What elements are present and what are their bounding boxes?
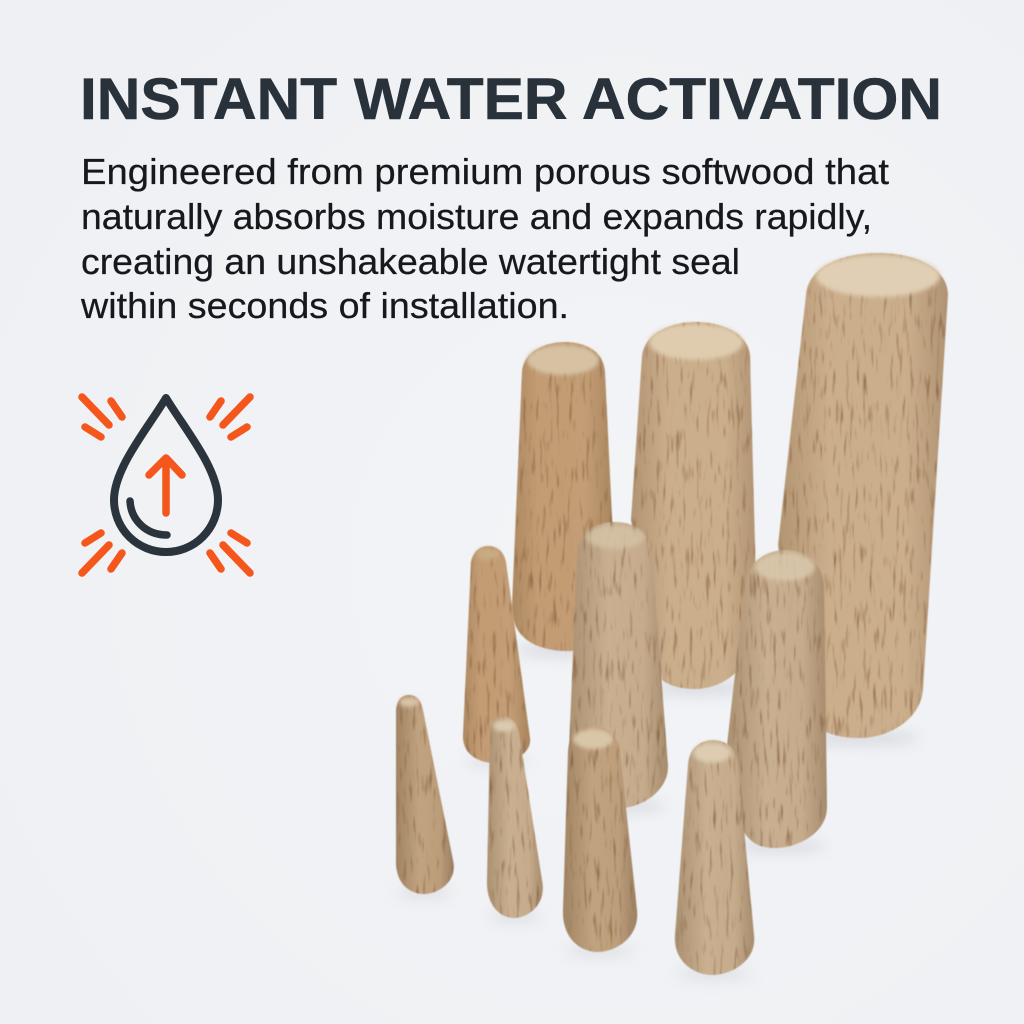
body text: creating an unshakeable watertight seal [81, 241, 740, 282]
product photo: wooden plugs [396, 253, 948, 979]
inner highlight curve [130, 501, 167, 535]
title: INSTANT WATER ACTIVATION [80, 67, 942, 132]
plug: back middle [631, 322, 757, 689]
plug: thin back left [463, 546, 530, 763]
plug: small far left [396, 695, 454, 894]
drop outline [114, 398, 218, 552]
body text: within seconds of installation. [80, 285, 569, 326]
plug: back left [512, 342, 616, 651]
burst rays [82, 397, 250, 573]
icon: water drop with upward arrow and bursts [82, 397, 250, 573]
upward arrow [149, 458, 182, 513]
plug: small third [563, 726, 637, 952]
body text [80, 151, 889, 326]
contact shadows [396, 642, 920, 979]
plug: front right [675, 740, 754, 975]
plug: back right tall [778, 253, 948, 738]
plug: small second [487, 717, 543, 918]
plug: centre [569, 522, 668, 808]
plug: front of right [727, 550, 827, 848]
body text: Engineered from premium porous softwood that [81, 151, 889, 192]
body text: naturally absorbs moisture and expands rapidly, [81, 196, 872, 237]
